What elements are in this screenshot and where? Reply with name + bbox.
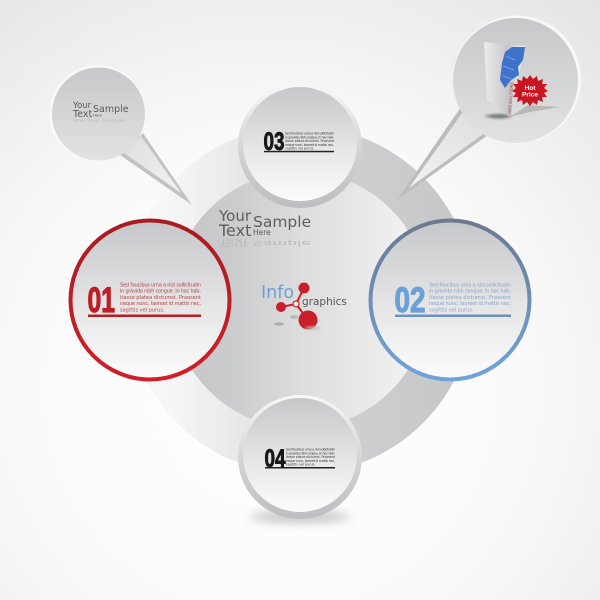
icon: hot price badge: Price: [522, 92, 538, 98]
heading: your sample text: Text: [218, 221, 251, 240]
logo: info graphics: Info: [261, 283, 294, 303]
heading: your sample text: Sample: [253, 213, 311, 231]
body text 01: Sed faucibus urna a nisl sollicitudin: [120, 282, 201, 288]
body text 02: neque nunc, laoreet id mattis nec,: [429, 301, 511, 307]
body text 01: itasse platea dictumst. Praesent: [120, 295, 201, 301]
text: your sample small: Sample: [93, 104, 129, 115]
central ring: [126, 126, 474, 474]
body text 02: sagittis vel purus.: [429, 307, 474, 313]
number 03: 03: [264, 128, 284, 156]
speech bubble: right with product: [397, 16, 581, 200]
heading reflection: Sample: [253, 239, 311, 248]
body text 04: [286, 448, 336, 467]
icon: hot price badge: Hot: [525, 85, 536, 92]
text: your sample small: Your Text Sample: [72, 118, 125, 124]
text: your sample small: Your: [72, 101, 92, 111]
rule 03: [264, 151, 334, 152]
body text 03: neque nunc, laoreet id mattis nec,: [285, 143, 334, 147]
number 01: 01: [88, 280, 115, 320]
body text 03: itasse platea dictumst. Praesent: [285, 139, 335, 143]
shadow under panel 04: [250, 512, 350, 522]
body text 01: sagittis vel purus.: [120, 307, 165, 313]
body text 03: sagittis vel purus.: [285, 147, 314, 151]
body text 03: in gravida nibh congue. In hac hab-: [285, 135, 335, 139]
panel: 04: [238, 395, 362, 519]
body text 02: itasse platea dictumst. Praesent: [429, 295, 511, 301]
rule 02: [395, 314, 511, 317]
body text 04: sagittis vel purus.: [286, 463, 315, 467]
heading reflection: Text: [218, 237, 249, 244]
body text 01: neque nunc, laoreet id mattis nec,: [120, 301, 201, 307]
rule 04: [265, 467, 335, 468]
panel: 03: [238, 84, 362, 208]
body text 03: [285, 132, 335, 151]
speech bubble: left: [49, 65, 192, 205]
heading: your sample text: [218, 207, 311, 248]
heading: your sample text: Your: [218, 207, 252, 225]
body text 04: itasse platea dictumst. Praesent: [286, 455, 336, 459]
icon: product box: WEB SOLUTIONS: [507, 81, 514, 114]
rule 01: [88, 314, 201, 317]
text: your sample small: Text: [72, 109, 92, 120]
icon: hot price badge: [512, 75, 548, 106]
body text 01: [120, 282, 201, 313]
body text 04: Sed faucibus urna a nisl sollicitudin: [286, 448, 335, 452]
panel: 02: [370, 220, 530, 380]
body text 03: Sed faucibus urna a nisl sollicitudin: [285, 132, 334, 136]
body text 02: in gravida nibh congue. In hac hab-: [429, 289, 511, 295]
body text 02: Sed faucibus urna a nisl sollicitudin: [429, 282, 511, 288]
body text 01: in gravida nibh congue. In hac hab-: [120, 289, 201, 295]
icon: product box: [484, 42, 560, 118]
body text 04: neque nunc, laoreet id mattis nec,: [286, 459, 335, 463]
body text 04: in gravida nibh congue. In hac hab-: [286, 451, 336, 455]
panel: 01: [70, 220, 230, 380]
logo: info graphics: graphics: [302, 296, 347, 308]
text: your sample small: [72, 101, 129, 124]
body text 02: [429, 282, 511, 313]
number 02: 02: [394, 280, 426, 320]
heading reflection: [218, 237, 311, 248]
number 04: 04: [264, 445, 286, 473]
text: your sample small: Here: [93, 112, 103, 118]
heading reflection: Your: [218, 242, 250, 248]
logo: info graphics: [261, 282, 347, 330]
heading: your sample text: Here: [253, 228, 271, 237]
